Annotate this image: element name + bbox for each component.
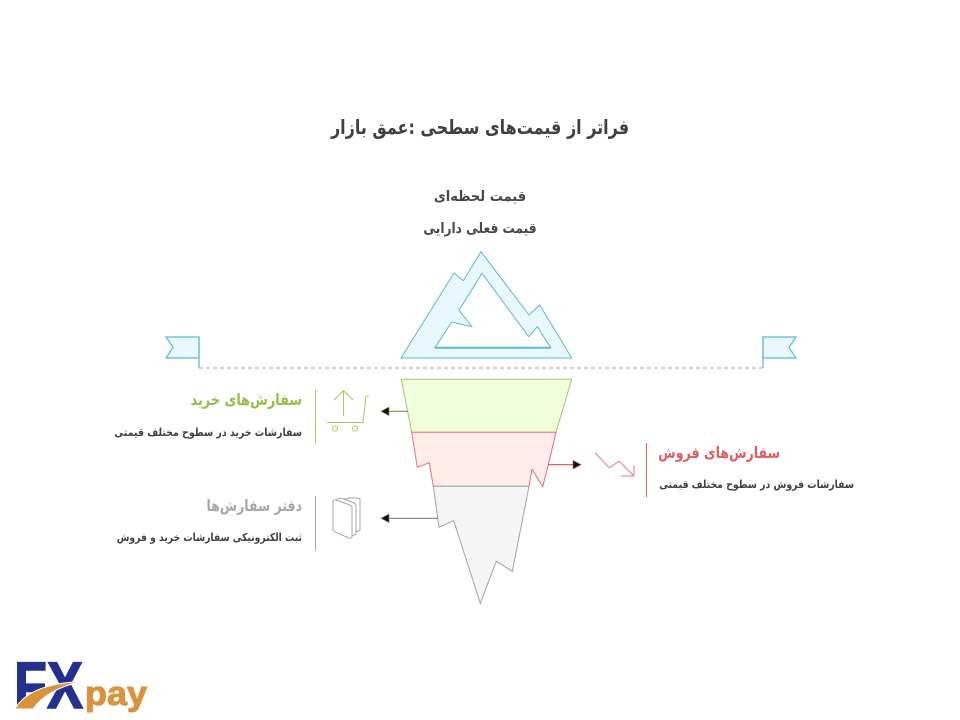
- label: spot price heading: قیمت لحظه‌ای: [434, 189, 526, 205]
- text: order book description: ثبت الکترونیکی سفارشات خرید و فروش: [117, 531, 302, 544]
- iceberg tip above water: [401, 252, 572, 358]
- waterline: [199, 367, 763, 369]
- icon: shopping cart with up arrow: [327, 390, 369, 431]
- icon: falling trend arrow: [595, 452, 634, 476]
- label: spot price description: قیمت فعلی دارایی: [423, 221, 537, 237]
- divider: order book: [314, 496, 316, 551]
- title: فراتر از قیمت‌های سطحی :عمق بازار: [331, 116, 629, 139]
- arrow: buy orders: [381, 407, 408, 416]
- arrow: order book: [381, 514, 438, 523]
- logo: FXpay: FX: [14, 648, 83, 720]
- heading: buy orders: سفارش‌های خرید: [191, 391, 302, 409]
- grey layer: order book: [433, 486, 529, 603]
- red layer: sell orders: [412, 432, 556, 487]
- text: buy orders description: سفارشات خرید در سطوح مختلف قیمتی: [114, 426, 302, 439]
- heading: sell orders: سفارش‌های فروش: [658, 444, 780, 462]
- text: sell orders description: سفارشات فروش در سطوح مختلف قیمتی: [659, 478, 854, 491]
- logo: FXpay: pay: [85, 675, 147, 713]
- divider: sell orders: [646, 443, 648, 497]
- heading: order book: دفتر سفارش‌ها: [207, 497, 302, 515]
- right flag: [763, 337, 796, 368]
- arrow: sell orders: [548, 460, 581, 469]
- left flag: [166, 337, 199, 368]
- divider: buy orders: [314, 390, 316, 444]
- green layer: buy orders: [401, 379, 572, 432]
- icon: open book: [333, 498, 360, 538]
